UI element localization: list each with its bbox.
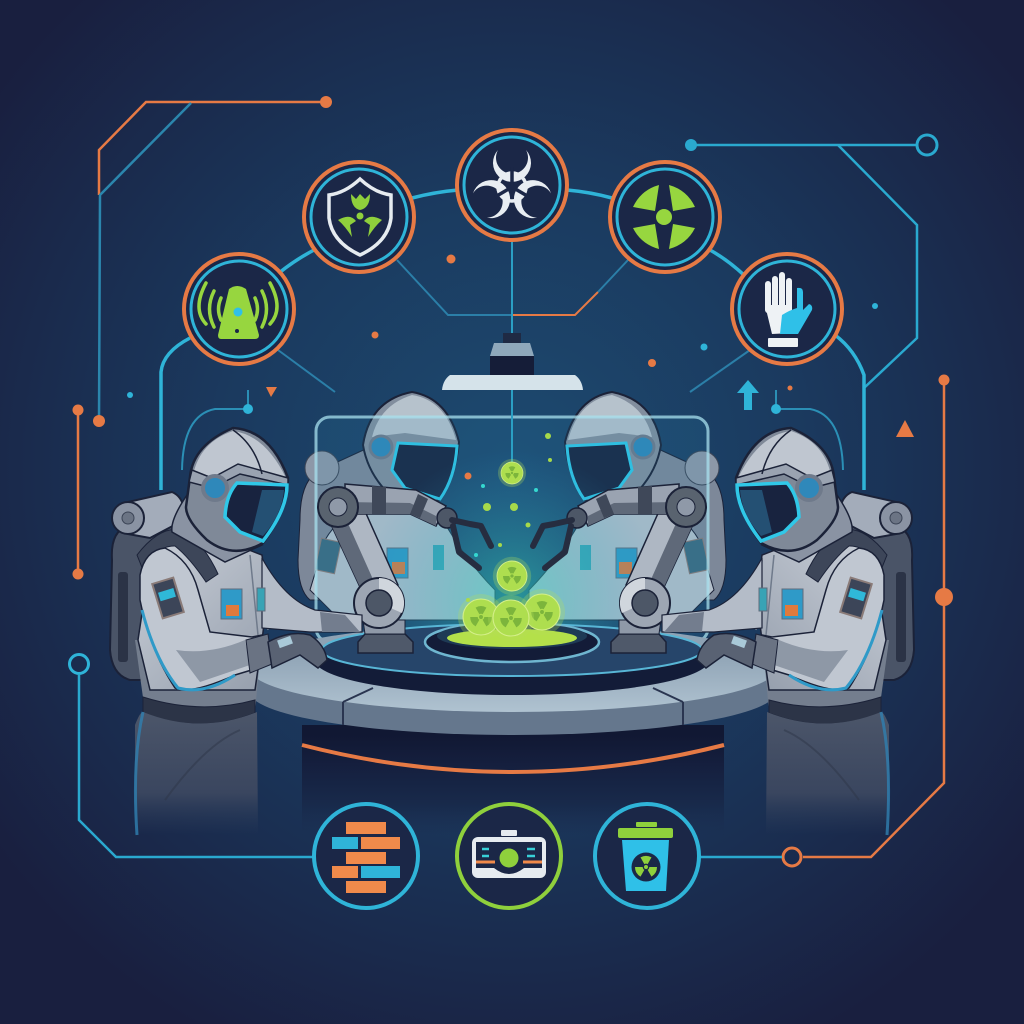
circuit lines: left side xyxy=(70,404,314,857)
radioactive spheres xyxy=(458,459,565,641)
circuit lines: top right xyxy=(685,135,937,388)
icon: shield xyxy=(304,162,414,272)
icon: alarm / metronome xyxy=(184,254,294,364)
table inner ring xyxy=(315,624,709,695)
reactor dish xyxy=(425,622,599,662)
lamp: camera head xyxy=(490,333,534,376)
front astronaut left xyxy=(110,428,362,835)
icon: radiation xyxy=(610,162,720,272)
robot arm right xyxy=(533,484,706,653)
pedestal xyxy=(302,725,724,837)
robot arm left xyxy=(318,484,491,653)
back astronaut right xyxy=(529,392,726,620)
circuit lines: top left xyxy=(93,96,332,427)
icon arc connector xyxy=(161,190,864,490)
icon: biohazard xyxy=(457,130,567,240)
icon: bricks xyxy=(314,804,418,908)
icon: device camera xyxy=(457,804,561,908)
glass chamber xyxy=(316,417,708,642)
icon: radioactive waste bin xyxy=(595,804,699,908)
hexagon lines from icons to lab xyxy=(278,238,750,392)
table slab xyxy=(249,624,777,735)
small connector right xyxy=(771,390,843,470)
icon: glove xyxy=(732,254,842,364)
back astronaut left xyxy=(298,392,495,620)
floating dots and markers xyxy=(127,254,914,437)
circuit lines: right side xyxy=(700,374,953,866)
particles in chamber xyxy=(464,390,552,602)
front astronaut right xyxy=(662,428,914,835)
lamp bar xyxy=(442,375,583,390)
small connector left xyxy=(182,390,253,470)
